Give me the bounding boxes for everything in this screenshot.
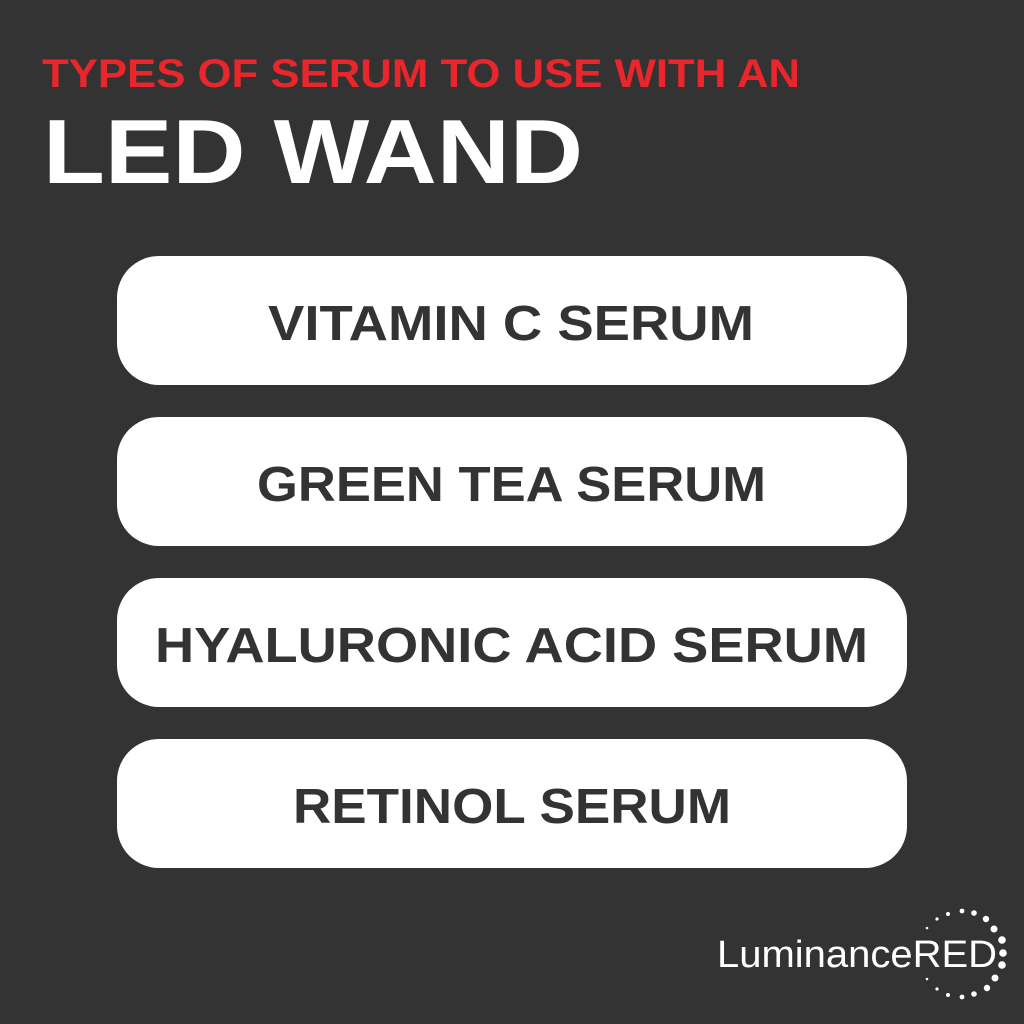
panel: hyaluronic acid <box>117 578 907 707</box>
panel: hyaluronic acid: HYALURONIC ACID SERUM <box>155 619 868 673</box>
main title: LED WAND <box>43 102 583 203</box>
panel: retinol <box>117 739 907 868</box>
icon: dot circle <box>926 909 1007 999</box>
panel: green tea: GREEN TEA SERUM <box>257 458 766 512</box>
title <box>42 52 800 203</box>
panel: vitamin c <box>117 256 907 385</box>
panel: retinol: RETINOL SERUM <box>293 780 731 834</box>
panel: green tea <box>117 417 907 546</box>
logo: LuminanceRED <box>717 934 997 976</box>
subtitle: TYPES OF SERUM TO USE WITH AN <box>42 52 800 96</box>
panel: vitamin c: VITAMIN C SERUM <box>268 297 754 351</box>
logo <box>717 909 1007 999</box>
